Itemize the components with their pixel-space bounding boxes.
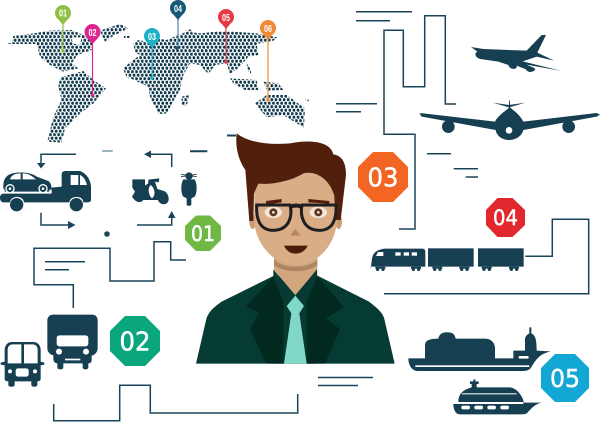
pin 01: 01	[59, 8, 67, 20]
dotted continents	[6, 24, 309, 143]
icon: cargo ship	[408, 327, 551, 371]
badge 04	[486, 198, 525, 237]
badge 05	[541, 354, 589, 402]
badge 01: 01	[191, 222, 215, 246]
mouth	[284, 246, 308, 254]
pin 05: 05	[222, 13, 230, 24]
pin 02: 02	[88, 28, 97, 39]
badge 04: 04	[493, 206, 518, 230]
pin 06: 06	[264, 24, 272, 35]
badge 02	[110, 316, 160, 366]
pin 01	[55, 5, 71, 53]
shirt	[273, 269, 317, 364]
icon: plane front	[419, 99, 600, 140]
nose	[290, 229, 301, 236]
arrow heads	[37, 150, 176, 237]
pin 03: 03	[148, 32, 156, 43]
icon: cruise ship	[453, 379, 542, 414]
ears	[249, 214, 256, 229]
badge 02: 02	[120, 328, 150, 358]
pin 06	[260, 20, 276, 102]
badge 05: 05	[550, 364, 580, 393]
glasses	[257, 205, 336, 230]
badge 01	[185, 216, 221, 251]
icon: van front	[1, 342, 44, 387]
hair	[236, 133, 346, 221]
pin 02	[84, 24, 100, 97]
neck	[274, 255, 317, 296]
world map	[6, 0, 309, 143]
pin 04: 04	[174, 4, 182, 15]
eyes	[265, 207, 327, 218]
eyebrows	[266, 199, 329, 204]
left lapel	[246, 277, 283, 364]
suit jacket	[196, 276, 395, 364]
icon: scooters	[132, 172, 197, 206]
pin 04	[170, 0, 186, 50]
face	[254, 165, 337, 265]
right lapel	[307, 277, 344, 364]
icon: car on tow truck	[0, 171, 91, 211]
pin 03	[144, 28, 160, 80]
badge 03	[358, 152, 408, 202]
icon: train	[371, 248, 524, 271]
badge 03: 03	[368, 164, 398, 194]
icon: plane top	[471, 35, 562, 72]
icon: truck front	[47, 315, 98, 369]
person	[196, 133, 395, 364]
tie	[284, 296, 307, 364]
pin 05	[218, 9, 234, 64]
